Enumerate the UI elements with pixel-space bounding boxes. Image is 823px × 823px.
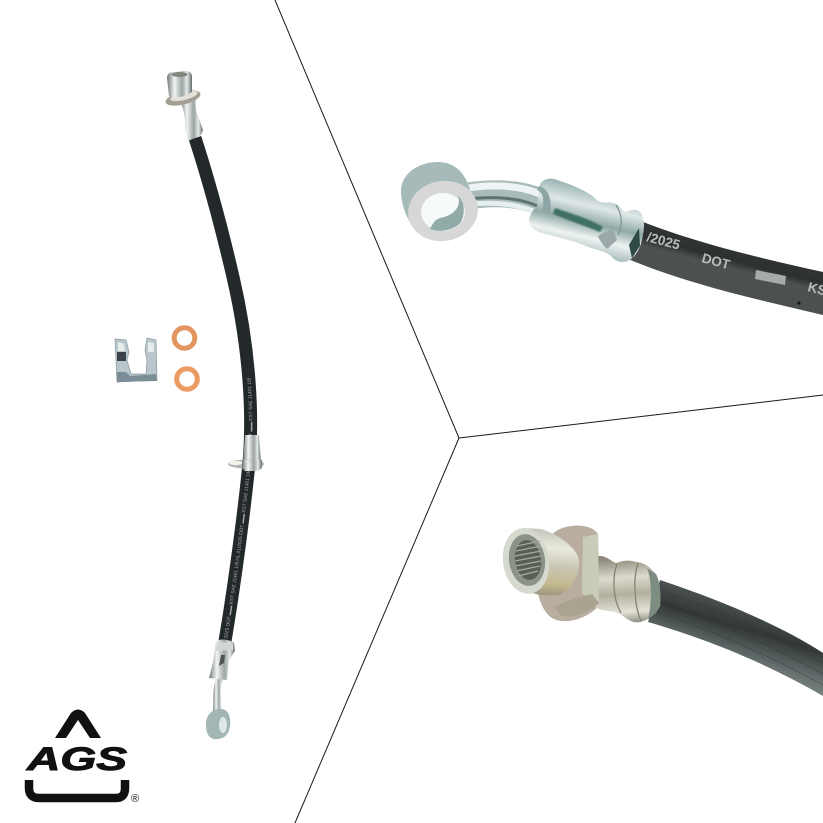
crimp ferrule: [594, 556, 660, 622]
threaded nut barrel: [499, 525, 579, 597]
bracket plate: [582, 534, 599, 603]
hose date and DOT markings: DOT: [700, 250, 732, 272]
registered mark: ®: [131, 793, 139, 805]
logo wordmark: AGS: [26, 740, 127, 777]
full brake hose overview: [166, 71, 264, 740]
internal thread: [512, 538, 544, 582]
hose date and DOT markings: /2025: [645, 229, 682, 253]
hose printed markings: 2025 DOT ▬▬ KST SAE J1401 1/8 HL 01/2025 DOT ▬▬ KST SAE J1401 1/8 HL 01/2025 DOT ▬▬ KST SAE J1401 1/8: [224, 378, 252, 638]
copper washer bottom: [177, 369, 197, 389]
rubber hose section: [628, 222, 823, 315]
detail: banjo end of hose: [401, 162, 823, 315]
ribbed rubber hose: [648, 580, 823, 696]
detail: threaded end of hose: [499, 525, 823, 696]
lower banjo fitting: [206, 640, 235, 739]
logo chevron: [55, 710, 101, 738]
middle bracket fitting: [228, 435, 264, 471]
retaining clip: [115, 338, 157, 382]
flange lower lip: [554, 594, 599, 616]
copper washer top: [174, 328, 195, 348]
divider lines: [275, 0, 823, 823]
logo base bracket: [29, 780, 125, 798]
hose marking bar: [755, 270, 786, 285]
crimp ferrule: [529, 179, 644, 262]
banjo eye: [401, 162, 483, 247]
bent banjo tube: [468, 186, 550, 216]
top fitting: [164, 71, 203, 141]
mounting flange: [535, 526, 600, 621]
AGS logo: [26, 710, 139, 805]
hose date and DOT markings: [645, 229, 823, 298]
hose tube: [195, 138, 251, 641]
